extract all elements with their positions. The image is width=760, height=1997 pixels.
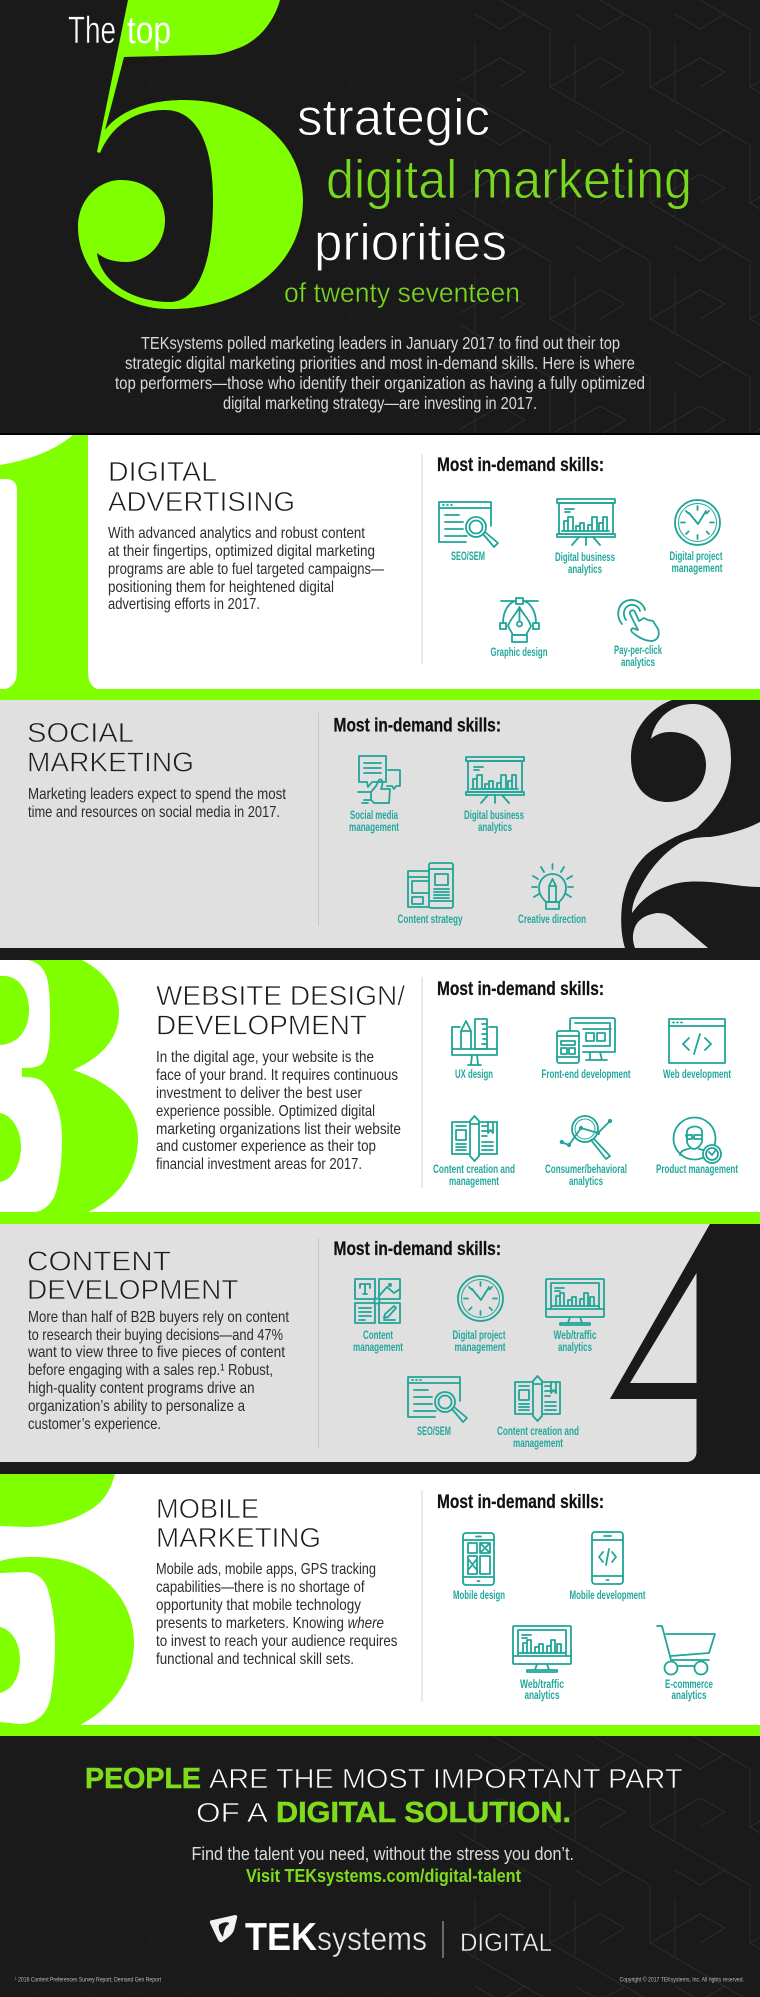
panel: 3 website design [0,960,760,1224]
skill: content management: management [353,1342,403,1354]
skill: digital business analytics [555,499,615,576]
skill: consumer/behavioral analytics: Consumer/behavioral [545,1164,627,1176]
skill: web/traffic analytics: Web/traffic [554,1330,597,1342]
body text: before engaging with a sales rep.¹ Robust, [28,1362,273,1379]
body text: marketing organizations list their website [156,1121,401,1138]
skill: content management: Content [363,1330,393,1342]
skill: digital project management: Digital project [670,551,723,563]
logo: TEKsystems Digital [210,1915,552,1959]
body text: advertising efforts in 2017. [108,596,260,613]
skill: SEO/SEM: SEO/SEM [417,1426,451,1438]
body text: time and resources on social media in 2017. [28,804,280,821]
big numeral 4 [610,1224,760,1474]
panel: 5 mobile marketing [0,1474,760,1736]
intro paragraph: top performers—those who identify their organization as having a fully optimized [115,373,645,393]
intro paragraph: digital marketing strategy—are investing in 2017. [223,393,537,413]
skill: creative direction [518,864,586,926]
body text: face of your brand. It requires continuous [156,1067,398,1084]
intro paragraph: strategic digital marketing priorities and most in-demand skills. Here is where [125,353,635,373]
body text: presents to marketers. Knowing where [156,1615,384,1632]
skill: SEO/SEM [408,1377,467,1438]
skill: content creation and management: management [449,1176,499,1188]
skill: social media management [349,756,400,834]
call to action [192,1844,574,1886]
closing headline: ARE THE MOST IMPORTANT PART [209,1763,682,1794]
big numeral 5 [0,1474,134,1725]
skill: mobile development: Mobile development [570,1590,646,1602]
skill: pay-per-click analytics: Pay-per-click [614,645,662,657]
skill: social media management: Social media [350,810,398,822]
closing headline: OF A [196,1797,268,1828]
skill: graphic design: Graphic design [490,647,548,659]
body text: to research their buying decisions—and 47% [28,1327,283,1344]
body text: functional and technical skill sets. [156,1651,354,1668]
skill: mobile development [570,1532,646,1602]
body text: at their fingertips, optimized digital marketing [108,543,375,560]
intro paragraph [115,333,645,413]
skill: content creation and management [497,1376,579,1450]
body text: high-quality content programs drive an [28,1380,254,1397]
skill: content creation and management: Content creation and [497,1426,579,1438]
body text [27,1309,289,1433]
body text: In the digital age, your website is the [156,1049,374,1066]
skill: SEO/SEM [439,502,498,563]
icon: logo triangle [210,1915,237,1942]
body text: Marketing leaders expect to spend the most [28,786,286,803]
call to action: Visit TEKsystems.com/digital-talent [246,1866,521,1886]
body text: With advanced analytics and robust content [108,525,365,542]
heading: SOCIAL [27,717,134,748]
body text: to invest to reach your audience requires [156,1633,398,1650]
heading: DEVELOPMENT [27,1274,238,1305]
panel: 1 digital advertising [0,435,760,700]
skill: digital business analytics: analytics [568,564,602,576]
heading: ADVERTISING [108,486,295,517]
skill: mobile design: Mobile design [453,1590,505,1602]
skill: social media management: management [349,822,399,834]
body text: and customer experience as their top [156,1138,376,1155]
heading: DEVELOPMENT [156,1010,367,1040]
skills heading: Most in-demand skills: [437,1492,604,1513]
skill: web/traffic analytics [546,1279,604,1354]
skill: consumer/behavioral analytics [545,1116,627,1188]
skill: digital project management [452,1276,506,1354]
panel: footer [0,1736,760,1997]
body text: capabilities—there is no shortage of [156,1579,365,1596]
skill: UX design [452,1019,497,1081]
heading: MOBILE [156,1493,259,1524]
skill: creative direction: Creative direction [518,914,586,926]
skill: digital project management: management [454,1342,506,1354]
panel: 2 social marketing [0,700,760,960]
skills heading: Most in-demand skills: [334,716,501,736]
closing headline: DIGITAL SOLUTION. [276,1797,571,1829]
skill: web development: Web development [663,1069,731,1081]
body text: customer’s experience. [28,1416,161,1433]
big numeral 2 [621,700,760,948]
big numeral 1 [0,435,97,689]
logo: TEKsystems Digital: systems [317,1920,427,1957]
closing headline: PEOPLE [85,1763,201,1795]
skill: digital project management: management [672,563,723,575]
body text: More than half of B2B buyers rely on content [28,1309,289,1326]
skill: UX design: UX design [455,1069,493,1081]
body text [108,525,384,613]
skill: product management [656,1118,738,1176]
panel: header [0,0,760,435]
skill: content strategy [398,863,463,926]
closing headline [85,1763,682,1829]
skill: digital business analytics: Digital business [464,810,524,822]
skill: pay-per-click analytics [614,600,662,669]
body text: investment to deliver the best user [156,1085,363,1102]
heading: DIGITAL [108,456,217,487]
title: strategic digital marketing priorities: priorities [314,214,507,272]
heading [27,717,194,778]
skill: content management [353,1279,403,1354]
body text: opportunity that mobile technology [156,1597,361,1614]
skills heading: Most in-demand skills: [437,979,604,1000]
skill: consumer/behavioral analytics: analytics [569,1176,603,1188]
skill: front-end development [542,1018,631,1081]
title: strategic digital marketing priorities: strategic [297,89,490,147]
skill: web/traffic analytics: analytics [558,1342,592,1354]
skill: digital project management: Digital project [452,1330,506,1342]
logo: TEKsystems Digital: TEK [245,1916,317,1959]
skill: pay-per-click analytics: analytics [621,657,655,669]
body text: financial investment areas for 2017. [156,1156,362,1173]
heading [27,1246,238,1305]
logo: TEKsystems Digital: DIGITAL [460,1929,552,1957]
skill: e-commerce analytics [657,1626,715,1702]
skill: content creation and management: Content creation and [433,1164,515,1176]
panel: 4 content development [0,1224,760,1474]
title: The top: The [68,10,116,52]
title: The top: top [127,10,171,52]
skill: e-commerce analytics: E-commerce [665,1679,713,1691]
skills heading: Most in-demand skills: [334,1239,501,1260]
skill: e-commerce analytics: analytics [672,1690,706,1702]
skill: SEO/SEM: SEO/SEM [451,551,485,563]
title: strategic digital marketing priorities: digital marketing [326,148,692,210]
skill: graphic design [490,598,548,659]
footnote: ¹ 2016 Content Preferences Survey Report, Demand Gen Report [15,1978,161,1984]
call to action: Find the talent you need, without the stress you don’t. [192,1844,574,1864]
heading: MARKETING [156,1522,321,1553]
skill: content strategy: Content strategy [398,914,463,926]
skill: web development [663,1019,731,1081]
body text: Mobile ads, mobile apps, GPS tracking [156,1561,376,1578]
skill: content creation and management [433,1116,515,1188]
skill: front-end development: Front-end development [542,1069,631,1081]
skills heading: Most in-demand skills: [437,455,604,476]
skill: content creation and management: management [513,1438,563,1450]
skill: web/traffic analytics: analytics [524,1690,560,1702]
skill: digital project management [670,500,723,575]
body text [156,1049,401,1173]
subtitle: of twenty seventeen: of twenty seventeen [284,277,520,308]
title: The top [68,10,171,52]
body text [156,1561,398,1668]
heading [156,1493,321,1553]
heading: MARKETING [27,746,194,778]
big numeral 3 [0,960,138,1212]
heading [108,456,295,517]
body text: want to view three to five pieces of content [27,1344,285,1361]
heading [156,980,405,1040]
skill: web/traffic analytics [513,1626,571,1702]
body text: experience possible. Optimized digital [156,1103,375,1120]
skill: digital business analytics [464,757,524,834]
skill: web/traffic analytics: Web/traffic [520,1679,564,1691]
body text [28,786,286,821]
intro paragraph: TEKsystems polled marketing leaders in January 2017 to find out their top [141,333,620,353]
body text: programs are able to fuel targeted campaigns— [108,561,384,578]
title: strategic digital marketing priorities [297,89,692,272]
body text: positioning them for heightened digital [108,579,334,596]
heading: CONTENT [27,1246,171,1276]
body text: organization’s ability to personalize a [28,1398,245,1415]
skill: digital business analytics: Digital business [555,552,615,564]
heading: WEBSITE DESIGN/ [156,980,405,1011]
skill: digital business analytics: analytics [478,822,512,834]
big numeral 5 [78,0,303,309]
skill: mobile design [453,1533,505,1602]
